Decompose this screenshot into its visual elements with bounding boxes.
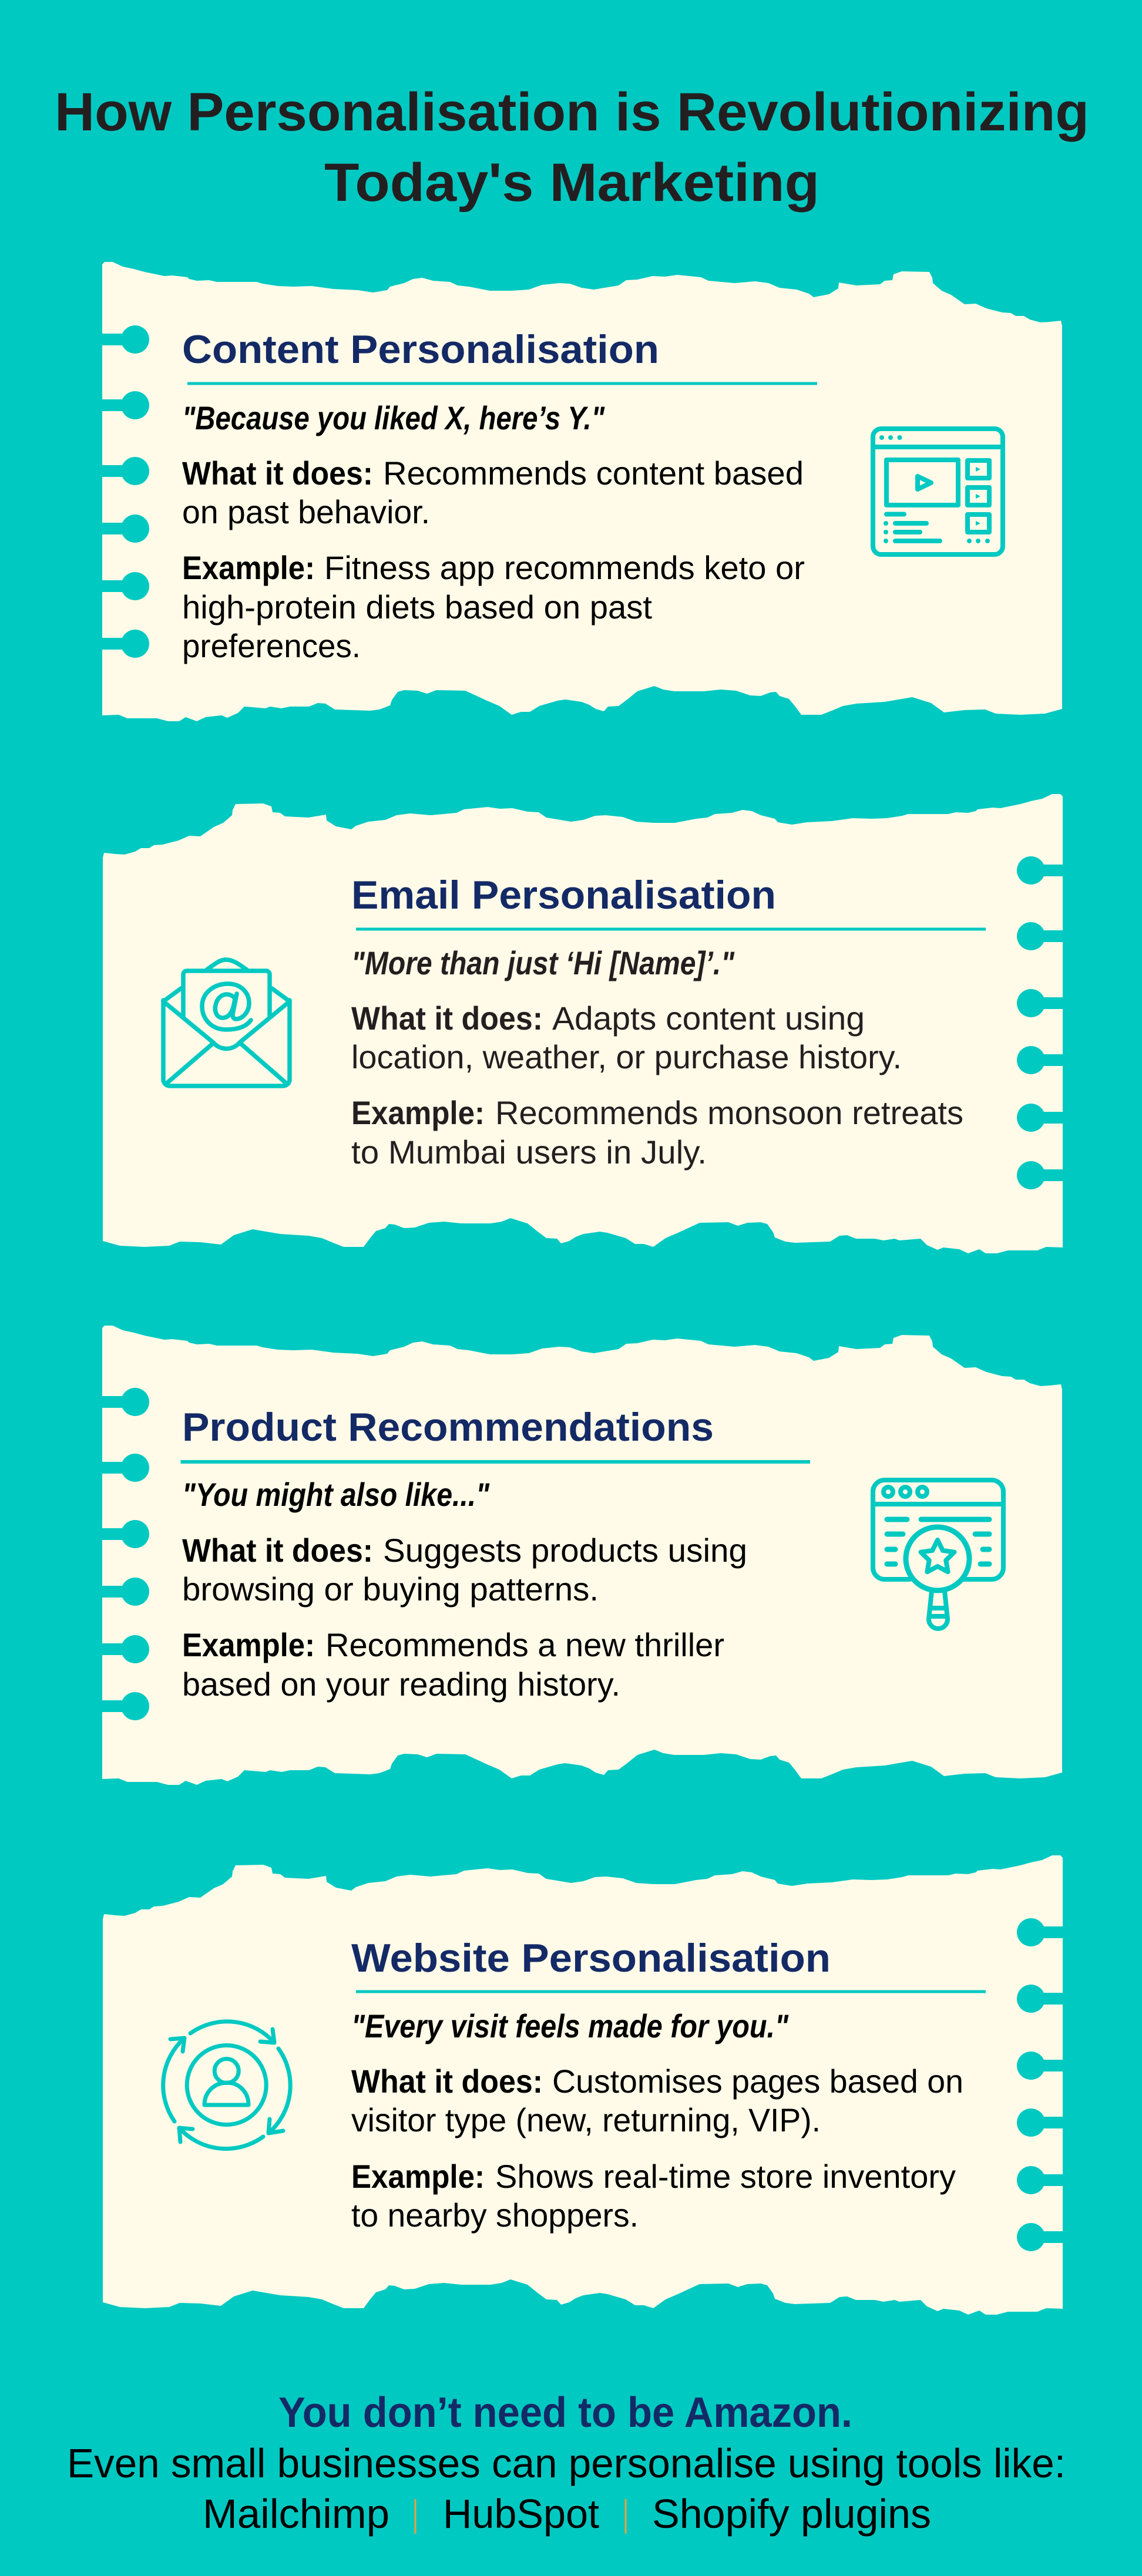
heading underline [181,1460,810,1464]
torn paper sheet [102,262,1062,721]
title: How Personalisation is Revolutionizing [55,82,1089,142]
quote: "Every visit feels made for you." [351,2007,789,2044]
what it does [351,1000,902,1075]
heading underline [356,928,986,930]
example: based on your reading history. [182,1666,620,1703]
what it does [351,2063,963,2138]
body copy [351,944,963,1171]
example: Fitness app recommends keto or [324,549,805,586]
example: Example: [182,549,315,586]
what it does: location, weather, or purchase history. [351,1038,902,1075]
heading: Website Personalisation [351,1936,831,1980]
tool names [203,2491,931,2537]
closing subline: Even small businesses can personalise using tools like: [67,2440,1066,2486]
heading underline [187,382,817,385]
icon: browser with magnifier and star [873,1480,1003,1629]
example: Shows real-time store inventory [495,2158,956,2195]
binder notches [100,325,149,658]
heading: Product Recommendations [182,1405,714,1450]
tool names: Shopify plugins [652,2491,931,2537]
panel: product recommendations [100,1326,1062,1785]
example [351,2158,956,2234]
panel: website personalisation [103,1855,1066,2315]
what it does: Customises pages based on [552,2063,963,2100]
title [55,82,1089,213]
example [351,1094,963,1171]
example: high-protein diets based on past [182,588,652,625]
what it does: Suggests products using [383,1532,747,1569]
what it does [182,455,804,530]
torn paper sheet [103,1855,1063,2315]
example: preferences. [182,627,361,664]
torn paper sheet [103,794,1063,1253]
what it does: on past behavior. [182,493,430,530]
heading underline [356,1990,986,1993]
icon: video browser window [873,429,1003,554]
example: to nearby shoppers. [351,2197,639,2234]
quote: "More than just ‘Hi [Name]’." [351,944,735,981]
what it does: What it does: [182,455,373,492]
binder notches [1017,1918,1066,2251]
what it does: Recommends content based [383,455,804,492]
closing message [67,2389,1066,2537]
panel: email personalisation [103,794,1066,1253]
what it does: What it does: [351,1000,543,1037]
binder notches [1017,856,1066,1189]
heading: Email Personalisation [351,873,776,917]
example: to Mumbai users in July. [351,1134,707,1171]
what it does [182,1532,747,1608]
tool names: Mailchimp [203,2491,389,2537]
binder notches [100,1388,149,1720]
example: Recommends a new thriller [325,1626,724,1663]
tool names: HubSpot [443,2491,599,2537]
example: Recommends monsoon retreats [495,1094,963,1131]
what it does: What it does: [182,1532,373,1569]
quote: "You might also like..." [182,1476,490,1513]
example: Example: [182,1626,315,1663]
example: Example: [351,1094,485,1131]
quote: "Because you liked X, here’s Y." [182,399,605,436]
icon: open envelope with at sign [163,960,290,1086]
example: Example: [351,2158,485,2195]
what it does: visitor type (new, returning, VIP). [351,2101,821,2138]
panel: content personalisation [100,262,1062,721]
icon: user with circular arrows [163,2022,290,2149]
torn paper sheet [102,1326,1062,1785]
what it does: What it does: [351,2063,543,2100]
what it does: Adapts content using [552,1000,865,1037]
title: Today's Marketing [324,153,819,213]
closing headline: You don’t need to be Amazon. [278,2389,852,2436]
example [182,1626,724,1703]
heading: Content Personalisation [182,327,659,372]
example [182,549,805,664]
what it does: browsing or buying patterns. [182,1571,599,1608]
